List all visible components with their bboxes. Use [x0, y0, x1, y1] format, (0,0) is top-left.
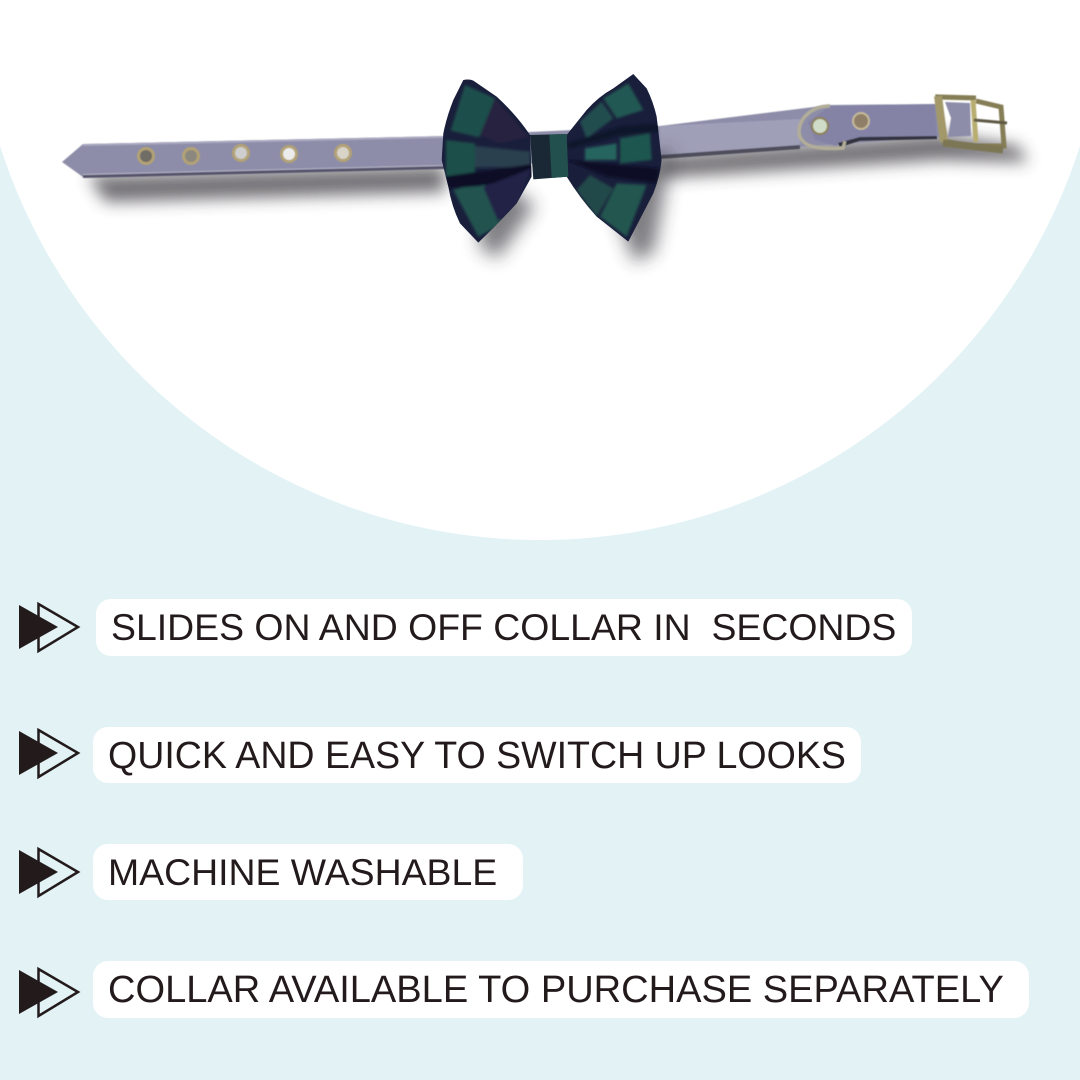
feature row 3	[19, 844, 523, 900]
eyelets	[138, 146, 350, 164]
icon: double arrow	[19, 728, 80, 780]
collar strap	[62, 104, 940, 178]
text: machine washable	[93, 844, 523, 900]
bow tie shadow	[480, 150, 672, 262]
feature row 1	[19, 599, 912, 656]
left wing	[442, 80, 532, 242]
icon: double arrow	[19, 846, 80, 898]
text: quick and easy: QUICK AND EASY TO SWITCH UP LOOKS	[108, 734, 846, 776]
right wing	[566, 74, 662, 242]
D ring and rivets	[799, 106, 869, 148]
icon: double arrow	[19, 966, 80, 1018]
feature row 2	[19, 727, 861, 783]
product photo: collar with bow tie	[62, 74, 1035, 271]
collar overlay keeper	[808, 104, 937, 146]
text: collar available: COLLAR AVAILABLE TO PURCHASE SEPARATELY	[108, 969, 1004, 1011]
knot	[530, 134, 568, 179]
bow tie	[442, 74, 662, 242]
icon: double arrow	[19, 602, 80, 654]
white circle backdrop	[0, 0, 1080, 540]
text: machine washable: MACHINE WASHABLE	[108, 851, 497, 893]
text: slides on and off: SLIDES ON AND OFF COLLAR IN SECONDS	[111, 606, 896, 648]
collar shadow	[88, 134, 1028, 202]
feature row 4	[19, 961, 1029, 1018]
buckle	[938, 96, 1007, 150]
